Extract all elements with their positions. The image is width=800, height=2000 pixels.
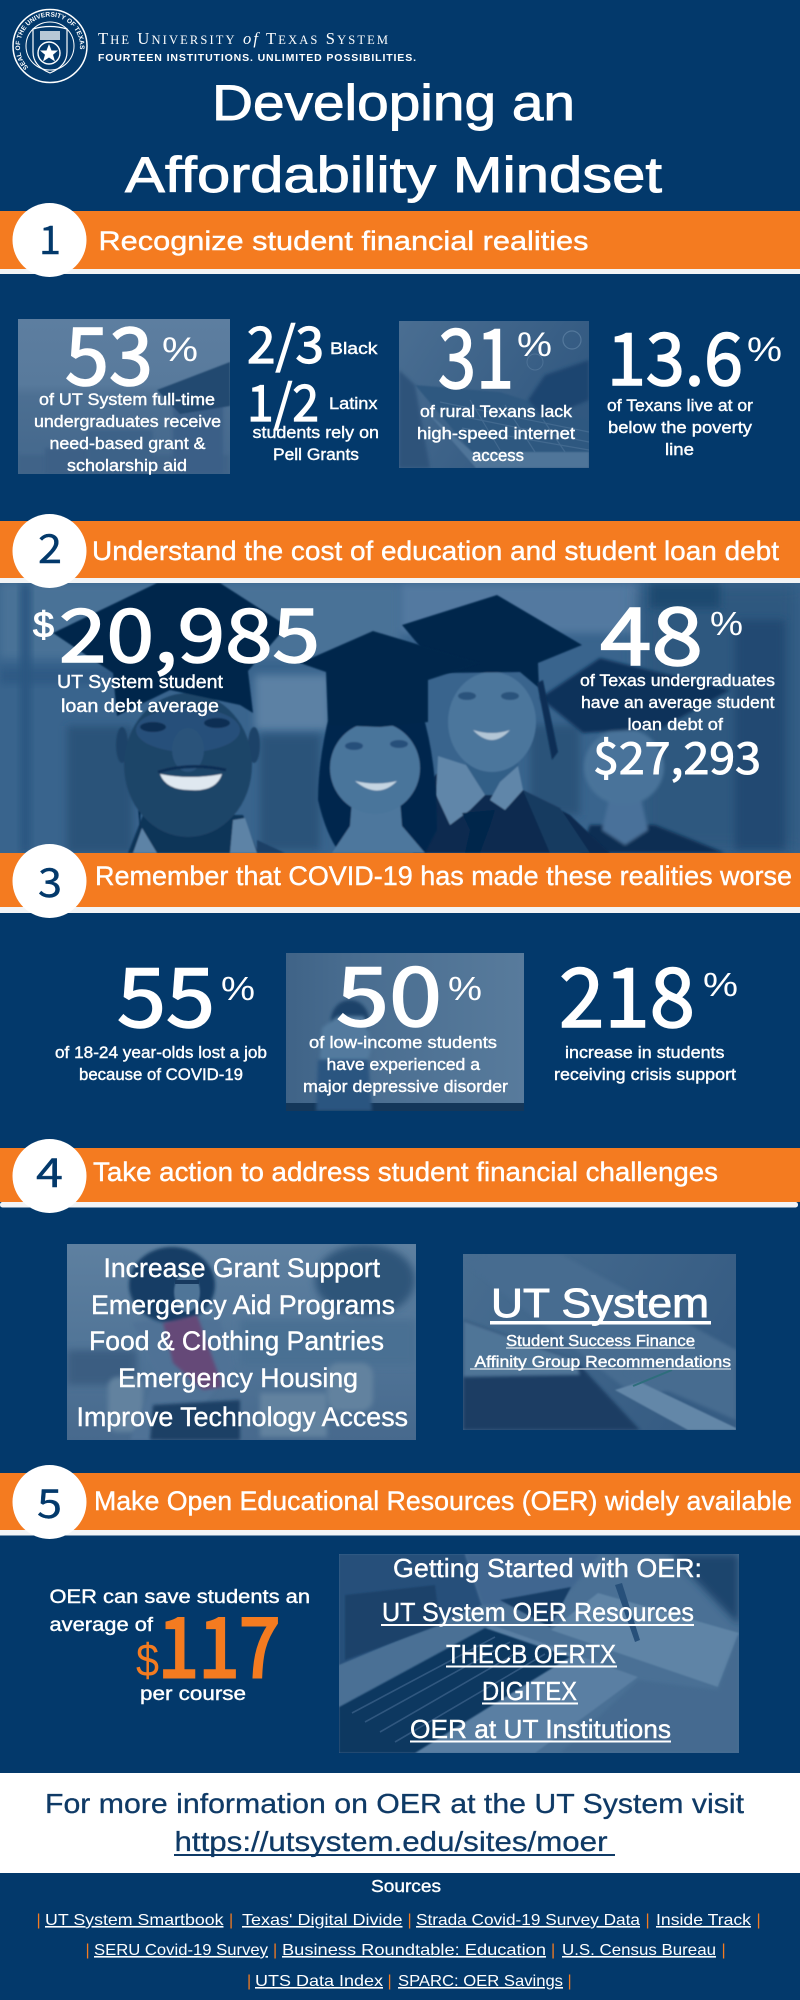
stat description: high-speed internet bbox=[417, 425, 575, 443]
stat: 55 percent lost a job: of 18-24 year-olds lost a job bbox=[55, 1044, 267, 1062]
section 4 header: 4 bbox=[36, 1141, 63, 1199]
sources row 3: | bbox=[568, 1973, 572, 1990]
sources row 2: SERU Covid-19 Survey bbox=[94, 1942, 268, 1959]
stat value: 50 bbox=[336, 931, 442, 1050]
callout: OER savings bbox=[50, 1582, 310, 1705]
stat: 55 percent lost a job: 55 bbox=[117, 932, 215, 1051]
resource links: DIGITEX bbox=[482, 1676, 577, 1706]
sources row 1: Texas' Digital Divide bbox=[242, 1912, 403, 1929]
call to action band: https://utsystem.edu/sites/moer bbox=[174, 1826, 608, 1857]
action items: Emergency Housing bbox=[118, 1363, 358, 1393]
stat description: major depressive disorder bbox=[303, 1078, 509, 1096]
section 5 header bbox=[0, 1465, 800, 1539]
section 4 header: Take action to address student financial challenges bbox=[93, 1157, 718, 1187]
action items: Emergency Aid Programs bbox=[91, 1290, 395, 1320]
stat: Pell Grants fractions: students rely on bbox=[252, 424, 379, 442]
action items: Food & Clothing Pantries bbox=[89, 1326, 384, 1356]
recommendations link: Student Success Finance bbox=[506, 1333, 695, 1350]
stat: Pell Grants fractions: 2/3 bbox=[247, 306, 324, 378]
stat description: of UT System full-time bbox=[39, 391, 215, 409]
resource links: THECB OERTX bbox=[446, 1639, 616, 1669]
callout: OER savings: $ bbox=[136, 1634, 159, 1686]
stat: average student loan debt: loan debt average bbox=[61, 696, 219, 716]
sources row 2: Business Roundtable: Education bbox=[282, 1942, 546, 1959]
section 2 header: Understand the cost of education and student loan debt bbox=[92, 536, 780, 566]
stat description: scholarship aid bbox=[67, 457, 187, 475]
sources row 1: | bbox=[36, 1912, 41, 1929]
section 5 header: Make Open Educational Resources (OER) widely available bbox=[94, 1486, 792, 1516]
section 2 header: 2 bbox=[38, 517, 62, 575]
logo: wordmark: FOURTEEN INSTITUTIONS. UNLIMITED POSSIBILITIES. bbox=[98, 52, 416, 64]
stat description: undergraduates receive bbox=[34, 413, 221, 431]
rear graduate bbox=[540, 658, 730, 853]
sources row 2: | bbox=[551, 1942, 555, 1959]
logo: wordmark: THE UNIVERSITY of TEXAS SYSTEM bbox=[98, 29, 388, 48]
man in front bbox=[53, 583, 287, 853]
section 5 header: 5 bbox=[37, 1472, 62, 1530]
action items: Improve Technology Access bbox=[76, 1402, 408, 1432]
section 1 header: Recognize student financial realities bbox=[98, 226, 588, 256]
sources row 2: U.S. Census Bureau bbox=[562, 1942, 716, 1959]
stat: 218 percent crisis support: receiving crisis support bbox=[554, 1066, 736, 1084]
action items bbox=[76, 1253, 408, 1432]
section 3 header bbox=[0, 844, 800, 918]
stat description bbox=[303, 1034, 509, 1096]
stat value: % bbox=[517, 326, 552, 364]
sources row 1 bbox=[36, 1912, 761, 1929]
sources row 1: Inside Track bbox=[656, 1912, 752, 1929]
action items: Increase Grant Support bbox=[104, 1253, 380, 1283]
sources row 3: | bbox=[247, 1973, 251, 1990]
panel: 53 percent stat bbox=[18, 319, 230, 475]
stat: 55 percent lost a job bbox=[55, 932, 267, 1084]
stat value: 53 bbox=[65, 293, 153, 409]
recommendations link: Affinity Group Recommendations bbox=[474, 1354, 731, 1371]
stat description: of low-income students bbox=[309, 1034, 497, 1052]
stat: 48 percent of undergraduates: $27,293 bbox=[593, 723, 761, 787]
stat description: of rural Texans lack bbox=[420, 403, 573, 421]
stat: 48 percent of undergraduates: of Texas undergraduates bbox=[580, 672, 775, 690]
stat value: % bbox=[162, 331, 198, 369]
stat description bbox=[417, 403, 575, 465]
stat: 48 percent of undergraduates: have an average student bbox=[581, 694, 775, 712]
stat description: have experienced a bbox=[326, 1056, 481, 1074]
resource links: OER at UT Institutions bbox=[410, 1714, 671, 1744]
panel: actions list bbox=[67, 1244, 416, 1440]
recommendations link bbox=[470, 1333, 731, 1371]
stat: Pell Grants fractions: Pell Grants bbox=[273, 446, 359, 464]
stat: 48 percent of undergraduates: 48 bbox=[600, 573, 703, 689]
stat value bbox=[336, 931, 482, 1050]
sources list bbox=[36, 1912, 761, 1990]
panel: getting started with OER bbox=[339, 1553, 739, 1753]
stat: 218 percent crisis support bbox=[554, 932, 738, 1084]
stat: Pell Grants fractions: Latinx bbox=[329, 395, 378, 413]
stat: 13.6 percent poverty: of Texans live at or bbox=[607, 397, 754, 415]
sources row 1: | bbox=[756, 1912, 761, 1929]
sources row 3: SPARC: OER Savings bbox=[398, 1973, 563, 1990]
panel: UT System recommendations bbox=[463, 1254, 736, 1430]
sources row 1: | bbox=[229, 1912, 233, 1929]
panel: 31 percent stat bbox=[399, 321, 589, 468]
title bbox=[125, 75, 662, 203]
stat: Pell Grants fractions: 1/2 bbox=[247, 364, 319, 436]
section 3 header: 3 bbox=[38, 851, 62, 909]
stat: 13.6 percent poverty: line bbox=[665, 441, 694, 459]
sources heading: Sources bbox=[371, 1876, 441, 1896]
stat description: access bbox=[472, 447, 524, 465]
title: Developing an bbox=[212, 75, 575, 131]
callout: OER savings: OER can save students an bbox=[50, 1587, 310, 1608]
title: Affordability Mindset bbox=[125, 147, 662, 203]
stat description: need-based grant & bbox=[50, 435, 206, 453]
stat: Pell Grants fractions bbox=[247, 306, 379, 464]
call to action band bbox=[0, 1773, 800, 1873]
woman graduate bbox=[300, 630, 452, 853]
stat: 48 percent of undergraduates: loan debt of bbox=[628, 716, 723, 734]
panel: 50 percent depressive disorder bbox=[286, 953, 524, 1111]
heading link: UT System bbox=[491, 1280, 709, 1326]
logo: wordmark bbox=[98, 29, 416, 64]
stat: 55 percent lost a job: because of COVID-19 bbox=[79, 1066, 243, 1084]
section 4 header bbox=[0, 1139, 800, 1213]
stat: 13.6 percent poverty: 13.6 bbox=[607, 301, 743, 406]
man with tie bbox=[402, 595, 610, 853]
stat: 13.6 percent poverty: below the poverty bbox=[608, 419, 753, 437]
stat value: % bbox=[448, 970, 482, 1007]
stat: 13.6 percent poverty bbox=[607, 301, 782, 459]
resource links bbox=[381, 1597, 694, 1744]
stat: 218 percent crisis support: % bbox=[703, 966, 738, 1003]
stat description bbox=[34, 391, 221, 475]
stat: 48 percent of undergraduates bbox=[580, 573, 775, 787]
logo: university seal: SEAL OF THE UNIVERSITY OF TEXAS bbox=[15, 12, 85, 70]
stat: average student loan debt: UT System student bbox=[57, 672, 223, 692]
stat: average student loan debt: 20,985 bbox=[59, 577, 320, 684]
section 2 header bbox=[0, 514, 800, 588]
sources row 2 bbox=[86, 1942, 726, 1959]
stat: average student loan debt bbox=[33, 577, 320, 716]
stat value bbox=[65, 293, 198, 409]
stat value: 31 bbox=[438, 293, 514, 412]
stat: 48 percent of undergraduates: % bbox=[710, 605, 743, 642]
section 1 header: 1 bbox=[39, 210, 61, 266]
section 1 header bbox=[0, 203, 800, 277]
stat: average student loan debt: $ bbox=[33, 604, 54, 645]
call to action band: For more information on OER at the UT System visit bbox=[45, 1788, 744, 1819]
callout: OER savings: per course bbox=[140, 1684, 246, 1705]
callout: OER savings: 117 bbox=[158, 1582, 280, 1701]
sources row 1: Strada Covid-19 Survey Data bbox=[416, 1912, 640, 1929]
sources row 1: | bbox=[408, 1912, 412, 1929]
sources row 3: UTS Data Index bbox=[255, 1973, 383, 1990]
sources row 2: | bbox=[722, 1942, 726, 1959]
stat: Pell Grants fractions: Black bbox=[330, 340, 378, 358]
stat: 218 percent crisis support: increase in students bbox=[565, 1044, 724, 1062]
panel heading: Getting Started with OER: bbox=[393, 1553, 702, 1583]
sources row 2: | bbox=[86, 1942, 90, 1959]
callout: OER savings: average of bbox=[50, 1615, 154, 1636]
stat: 13.6 percent poverty: % bbox=[747, 331, 782, 369]
stat: 218 percent crisis support: 218 bbox=[559, 932, 695, 1051]
sources row 2: | bbox=[273, 1942, 277, 1959]
sources row 1: | bbox=[646, 1912, 650, 1929]
resource links: UT System OER Resources bbox=[382, 1597, 694, 1627]
sources row 3: | bbox=[388, 1973, 392, 1990]
sources row 3 bbox=[247, 1973, 572, 1990]
section 3 header: Remember that COVID-19 has made these realities worse bbox=[95, 861, 792, 891]
sources row 1: UT System Smartbook bbox=[45, 1912, 225, 1929]
stat: 55 percent lost a job: % bbox=[221, 970, 255, 1007]
photo: graduates bbox=[0, 583, 800, 853]
